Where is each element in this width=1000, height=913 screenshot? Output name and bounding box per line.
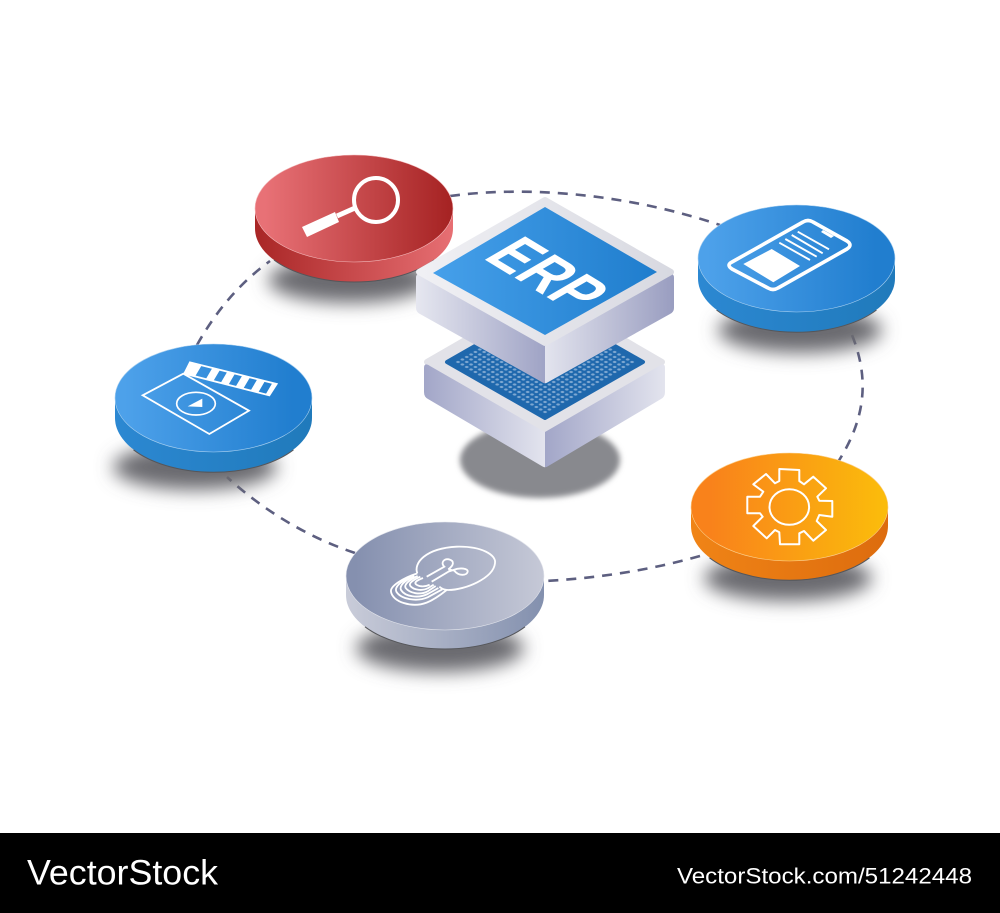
icon: clapperboard (143, 362, 277, 434)
disc shadow (113, 444, 277, 490)
disc side (255, 208, 453, 282)
icon: magnifying glass (302, 178, 398, 237)
lower chip slab (424, 294, 665, 467)
upper slab bezel (419, 200, 671, 343)
disc: settings (orange) (691, 453, 888, 601)
upper slab right face (545, 274, 674, 383)
disc side (691, 507, 888, 580)
disc shadow (356, 624, 524, 672)
disc: mobile (blue) (698, 205, 895, 353)
blue screen (433, 207, 657, 335)
disc top (691, 453, 888, 561)
disc shadow (718, 307, 882, 353)
disc side (698, 258, 895, 332)
ERP label: ERP (469, 227, 626, 321)
disc: video (blue) (113, 344, 312, 490)
footer image id: VectorStock.com/51242448 (677, 864, 972, 889)
central shadow (460, 422, 620, 498)
lower slab right face (545, 364, 665, 467)
upper chip slab (416, 200, 674, 383)
disc top (346, 522, 544, 630)
footer bar (0, 833, 1000, 913)
disc top (698, 205, 895, 312)
dotted circuit panel (447, 306, 643, 418)
footer brand: VectorStock (27, 854, 219, 892)
disc shadow (704, 555, 872, 601)
disc top (115, 344, 312, 452)
disc side (346, 576, 544, 649)
disc shadow (268, 257, 432, 303)
icon: smartphone (729, 220, 850, 290)
disc side (115, 398, 312, 472)
icon: light bulb (391, 547, 495, 605)
icon: gear (747, 469, 832, 544)
lower slab left face (424, 364, 545, 467)
disc: search (red) (255, 155, 453, 303)
lower slab top face (427, 294, 662, 429)
dashed connection ring (197, 192, 863, 581)
disc: idea (gray) (346, 522, 544, 672)
upper slab left face (416, 274, 545, 383)
disc top (255, 155, 453, 262)
